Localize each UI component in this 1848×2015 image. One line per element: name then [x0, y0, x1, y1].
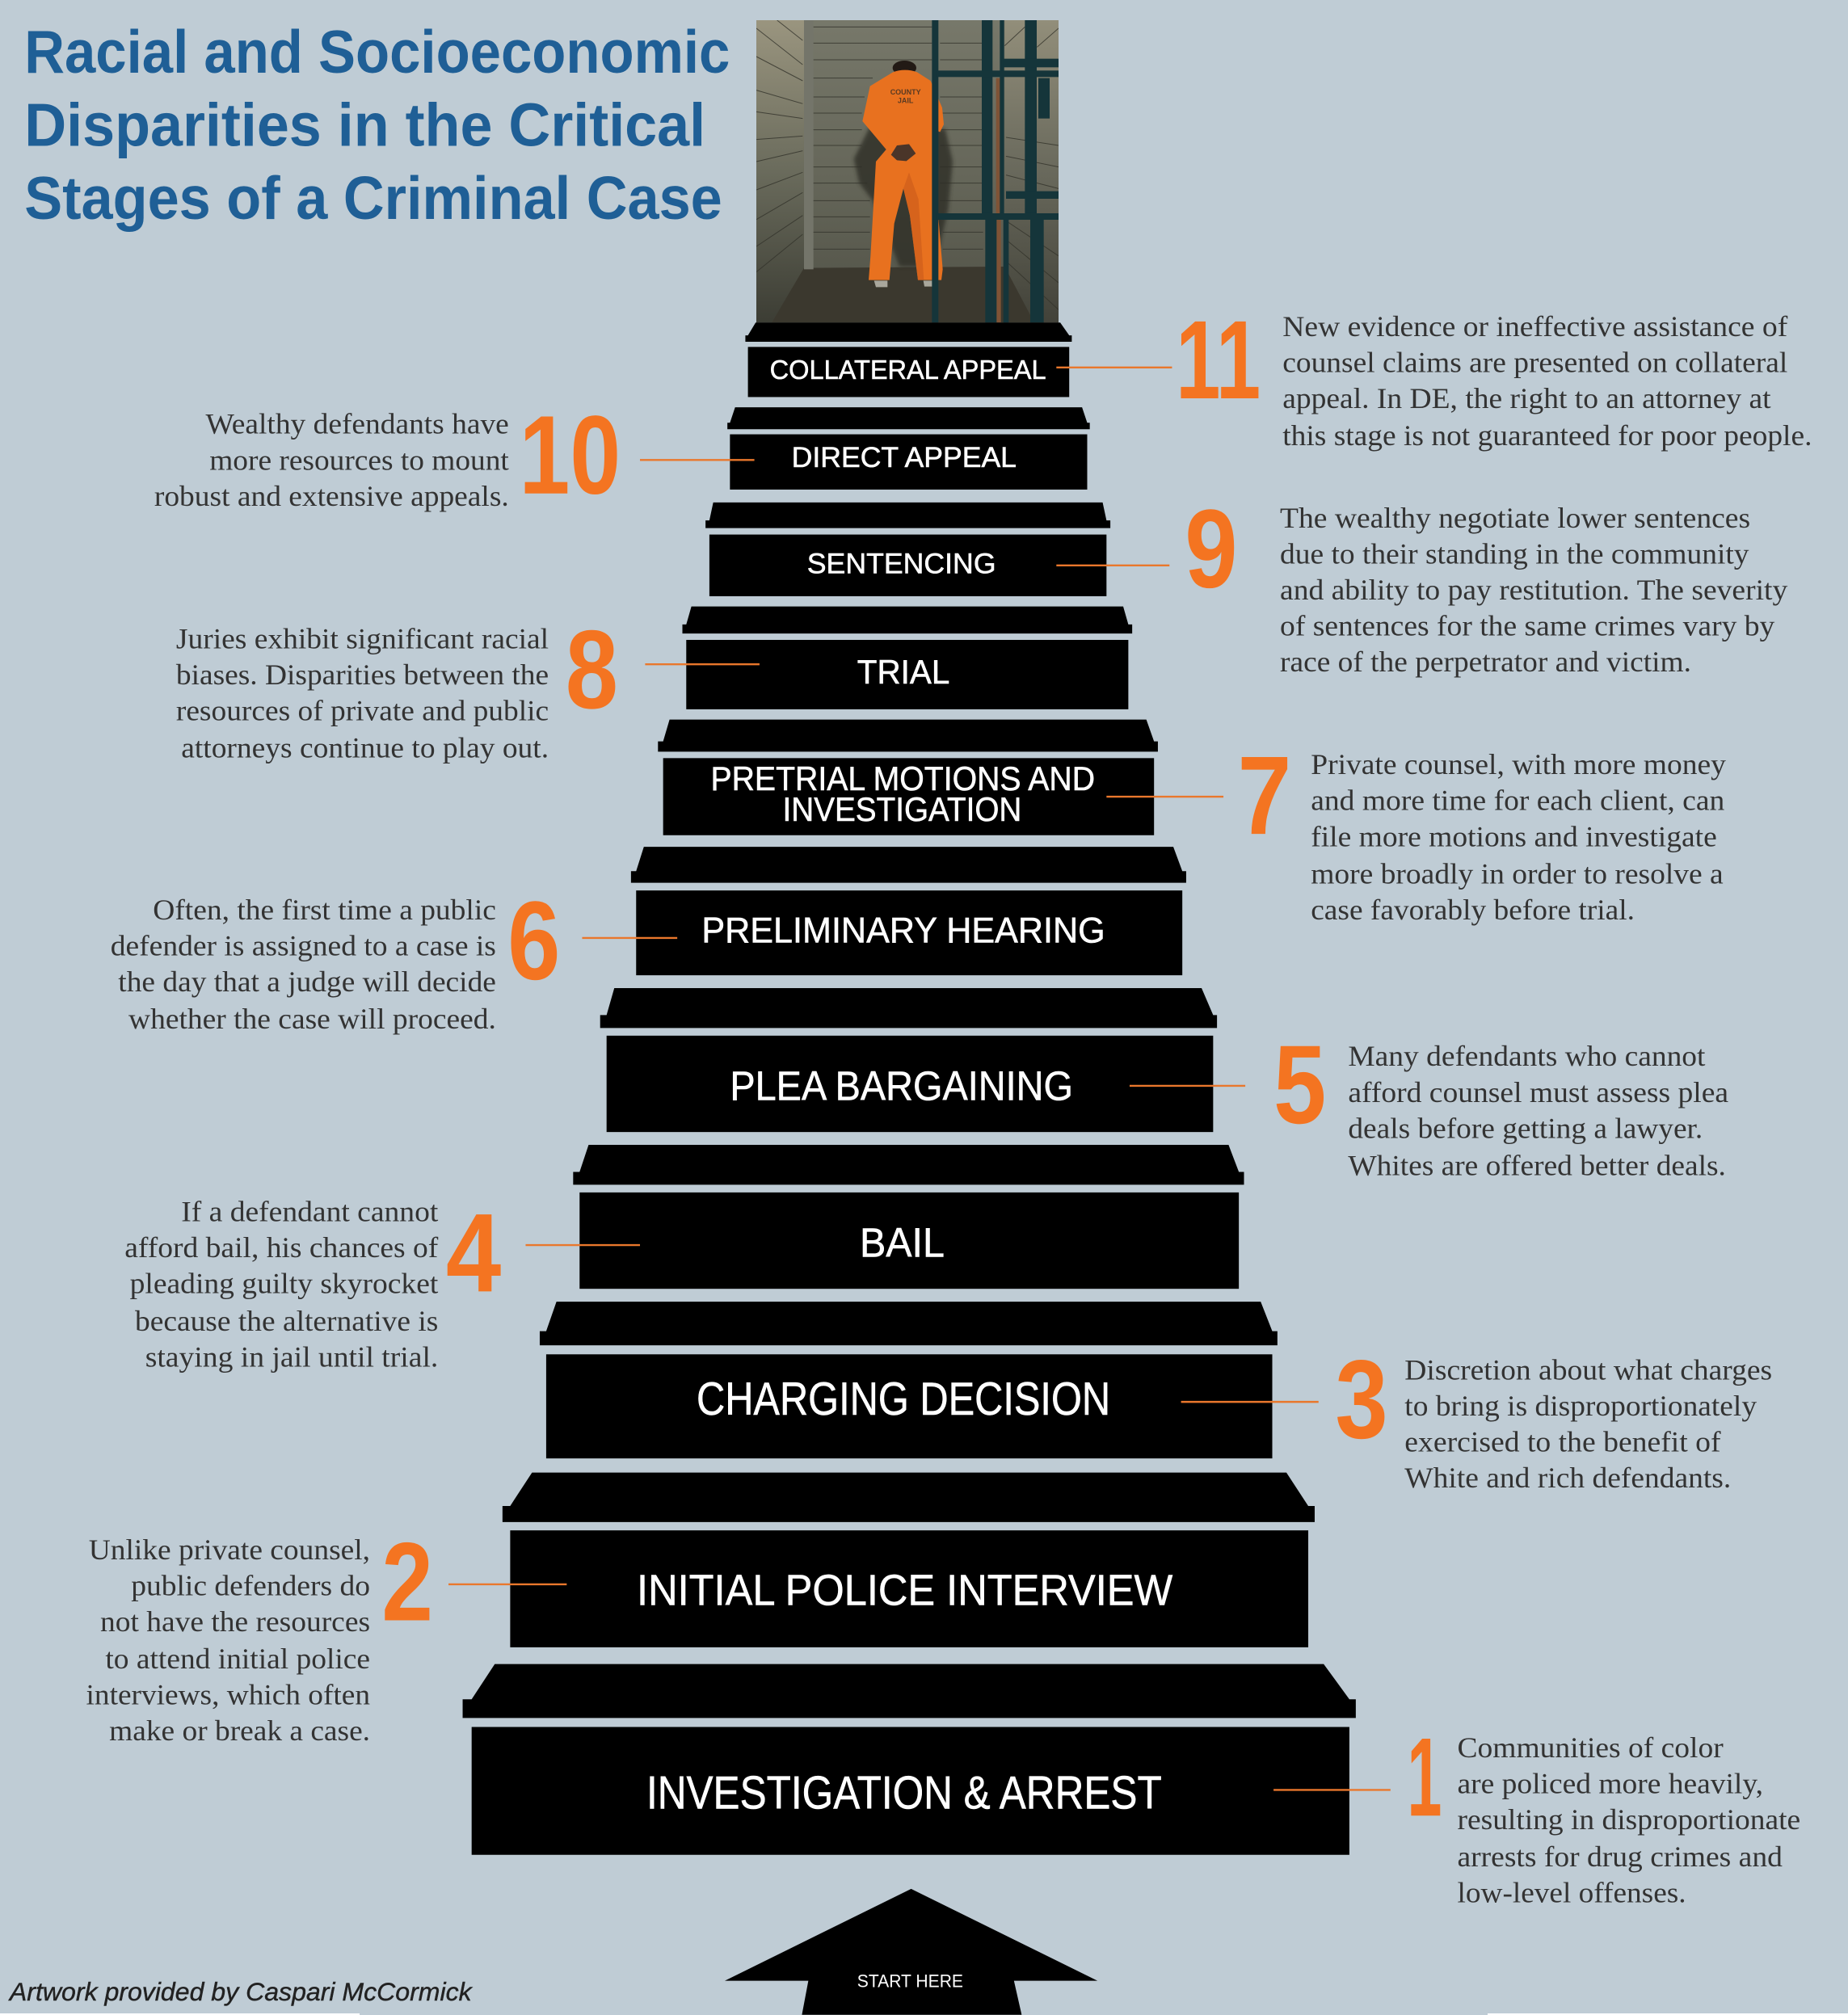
jumpsuit lettering — [890, 89, 921, 103]
text block 3 — [1404, 1353, 1772, 1494]
text block 7 — [1311, 748, 1726, 926]
text block 4: staying in jail until trial. — [145, 1340, 438, 1373]
leader line 3 — [1181, 1401, 1319, 1403]
step 9: sentencing: SENTENCING — [807, 548, 996, 579]
floor — [772, 267, 1034, 322]
number 7: 7 — [1238, 734, 1291, 858]
leader line 7 — [1106, 796, 1223, 797]
text block 5: afford counsel must assess plea — [1348, 1076, 1728, 1108]
text block 5: Many defendants who cannot — [1348, 1040, 1706, 1072]
number 6: 6 — [507, 879, 560, 1003]
title: Stages of a Criminal Case — [24, 164, 722, 232]
text block 2: not have the resources — [100, 1605, 370, 1638]
step 8: trial: TRIAL — [857, 654, 949, 691]
number 2: 2 — [381, 1520, 433, 1644]
step 9: sentencing — [705, 503, 1110, 596]
leader line 8 — [645, 663, 760, 665]
number 8: 8 — [566, 608, 618, 732]
text block 1: Communities of color — [1458, 1731, 1724, 1764]
step 10: direct appeal: DIRECT APPEAL — [792, 442, 1017, 473]
jumpsuit lettering: COUNTY — [890, 88, 921, 96]
text block 1: resulting in disproportionate — [1458, 1803, 1800, 1836]
jumpsuit shading — [903, 172, 924, 280]
text block 2: public defenders do — [131, 1569, 370, 1601]
jumpsuit lettering: JAIL — [898, 96, 914, 104]
number 4: 4 — [446, 1191, 501, 1315]
leader line 11 — [1056, 367, 1172, 368]
text block 2 — [86, 1533, 370, 1747]
step 2: initial police interview — [503, 1473, 1315, 1647]
text block 8: resources of private and public — [176, 694, 549, 726]
text block 11 — [1282, 310, 1812, 452]
text block 6: defender is assigned to a case is — [111, 929, 496, 961]
arrow: start here: START HERE — [857, 1971, 963, 1992]
text block 2: to attend initial police — [105, 1643, 370, 1675]
step 11: collateral appeal — [745, 322, 1071, 397]
leader line 9 — [1056, 565, 1169, 566]
title — [24, 18, 730, 232]
text block 10: robust and extensive appeals. — [154, 480, 509, 512]
step 1: investigation and arrest — [463, 1664, 1356, 1855]
step 10: direct appeal — [727, 407, 1090, 490]
step 5: plea bargaining — [600, 988, 1217, 1132]
rust strip — [996, 78, 1001, 322]
jumpsuit — [862, 70, 944, 280]
text block 8: biases. Disparities between the — [176, 658, 549, 691]
text block 1 — [1458, 1731, 1800, 1909]
arrow: start here — [725, 1889, 1097, 2015]
text block 5: Whites are offered better deals. — [1348, 1149, 1726, 1181]
text block 2: Unlike private counsel, — [89, 1533, 370, 1566]
step 3: charging decision: CHARGING DECISION — [697, 1373, 1110, 1425]
text block 10 — [154, 408, 509, 512]
step 6: preliminary hearing — [631, 847, 1186, 975]
corner pillar — [804, 97, 814, 270]
text block 6: Often, the first time a public — [153, 894, 496, 926]
brick lines — [756, 20, 1059, 309]
back wall — [756, 20, 1059, 322]
text block 11: appeal. In DE, the right to an attorney at — [1282, 382, 1771, 414]
text block 5: deals before getting a lawyer. — [1348, 1112, 1703, 1144]
text block 2: make or break a case. — [109, 1714, 370, 1747]
cell bars — [932, 20, 1059, 322]
text block 6: whether the case will proceed. — [128, 1003, 496, 1035]
text block 6: the day that a judge will decide — [118, 965, 496, 998]
text block 4: afford bail, his chances of — [124, 1231, 438, 1264]
step 4: bail — [573, 1145, 1244, 1289]
text block 3: exercised to the benefit of — [1404, 1425, 1721, 1458]
step 3: charging decision — [540, 1302, 1278, 1458]
text block 9 — [1280, 502, 1787, 678]
text block 7: Private counsel, with more money — [1311, 748, 1726, 780]
step 2: initial police interview: INITIAL POLICE INTERVIEW — [637, 1566, 1172, 1614]
leader line 4 — [525, 1244, 640, 1246]
step 11: collateral appeal: COLLATERAL APPEAL — [770, 355, 1046, 385]
step 7: pretrial motions and investigation: INVESTIGATION — [783, 791, 1021, 828]
leader line 10 — [640, 459, 755, 461]
text block 11: this stage is not guaranteed for poor people. — [1282, 419, 1812, 452]
text block 4 — [124, 1196, 438, 1373]
text block 7: and more time for each client, can — [1311, 785, 1725, 817]
text block 1: arrests for drug crimes and — [1458, 1840, 1783, 1873]
step 8: trial — [683, 607, 1132, 709]
number 10: 10 — [520, 393, 621, 518]
right side wall — [1004, 20, 1059, 322]
title: Disparities in the Critical — [24, 91, 705, 159]
text block 1: low-level offenses. — [1458, 1877, 1686, 1909]
text block 10: more resources to mount — [209, 444, 509, 476]
text block 7: file more motions and investigate — [1311, 820, 1717, 852]
leader line 2 — [448, 1584, 566, 1585]
text block 3: White and rich defendants. — [1404, 1462, 1731, 1494]
title: Racial and Socioeconomic — [24, 18, 730, 86]
text block 2: interviews, which often — [86, 1679, 370, 1711]
hands — [891, 144, 916, 161]
text block 7: more broadly in order to resolve a — [1311, 857, 1724, 890]
text block 1: are policed more heavily, — [1458, 1767, 1763, 1799]
text block 11: counsel claims are presented on collateral — [1282, 346, 1787, 378]
photo: prisoner in orange jumpsuit in a cell — [756, 20, 1059, 322]
text block 8 — [176, 622, 549, 764]
step 1: investigation and arrest: INVESTIGATION & ARREST — [646, 1767, 1162, 1819]
figure shadow — [854, 127, 953, 267]
text block 3: Discretion about what charges — [1404, 1353, 1772, 1386]
number 1: 1 — [1407, 1715, 1442, 1840]
text block 11: New evidence or ineffective assistance of — [1282, 310, 1787, 343]
text block 8: Juries exhibit significant racial — [176, 622, 549, 654]
text block 7: case favorably before trial. — [1311, 894, 1635, 926]
text block 10: Wealthy defendants have — [205, 408, 509, 440]
leader line 1 — [1273, 1789, 1391, 1790]
text block 4: If a defendant cannot — [181, 1196, 438, 1228]
number 9: 9 — [1185, 487, 1238, 612]
step 7: pretrial motions and investigation — [658, 720, 1158, 835]
text block 9: and ability to pay restitution. The severity — [1280, 574, 1787, 606]
text block 9: race of the perpetrator and victim. — [1280, 646, 1691, 678]
text block 4: because the alternative is — [135, 1305, 438, 1337]
leader line 5 — [1130, 1085, 1245, 1087]
number 3: 3 — [1335, 1338, 1388, 1462]
text block 8: attorneys continue to play out. — [181, 732, 549, 764]
credit line: Artwork provided by Caspari McCormick — [8, 1977, 474, 2006]
text block 5 — [1348, 1040, 1728, 1181]
step 4: bail: BAIL — [860, 1219, 945, 1265]
number 11: 11 — [1176, 298, 1261, 423]
text block 4: pleading guilty skyrocket — [130, 1268, 438, 1300]
step 6: preliminary hearing: PRELIMINARY HEARING — [701, 911, 1105, 951]
leader line 6 — [582, 937, 677, 939]
left side wall — [756, 20, 804, 322]
head — [892, 61, 916, 72]
text block 9: due to their standing in the community — [1280, 537, 1749, 570]
number 5: 5 — [1273, 1023, 1326, 1147]
text block 9: The wealthy negotiate lower sentences — [1280, 502, 1750, 534]
step 7: pretrial motions and investigation: PRETRIAL MOTIONS AND — [710, 760, 1095, 797]
text block 9: of sentences for the same crimes vary by — [1280, 609, 1775, 642]
step 5: plea bargaining: PLEA BARGAINING — [730, 1062, 1073, 1108]
text block 6 — [111, 894, 496, 1035]
shoes — [874, 280, 933, 287]
text block 3: to bring is disproportionately — [1404, 1390, 1757, 1422]
